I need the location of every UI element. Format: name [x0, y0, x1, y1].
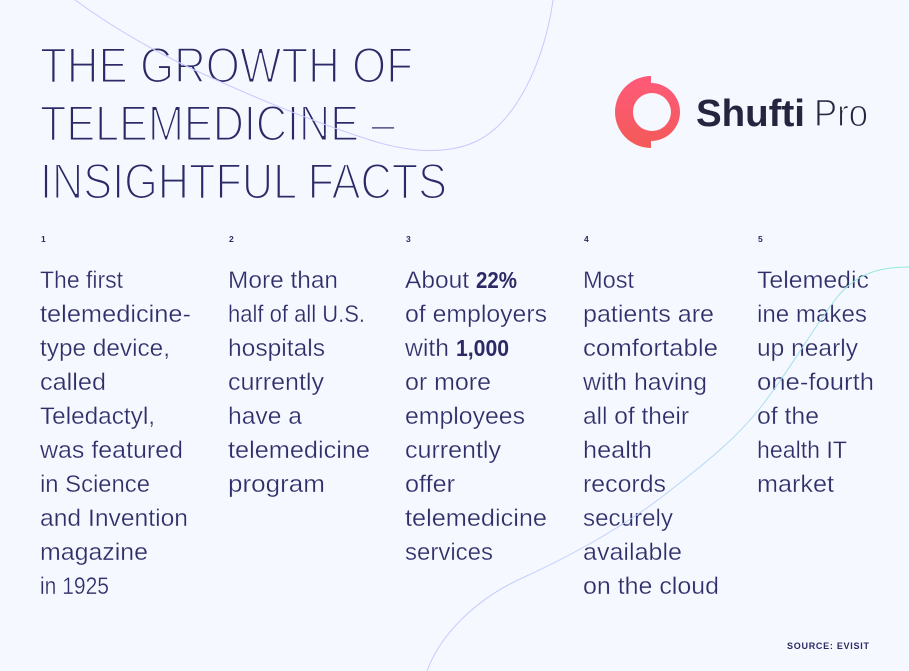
fact 2: [228, 234, 370, 498]
title: THE GROWTH OF: [40, 38, 413, 94]
fact 2: 2: [229, 234, 234, 244]
fact 1: Teledactyl,: [40, 403, 155, 430]
fact 2: hospitals: [228, 335, 325, 362]
fact 1: was featured: [39, 437, 183, 464]
fact 5: health IT: [757, 437, 847, 464]
fact 1: called: [40, 369, 106, 396]
title: [40, 38, 447, 210]
fact 5: ine makes: [757, 301, 867, 328]
fact 3: 3: [406, 234, 411, 244]
fact 3: 1,000: [456, 335, 509, 361]
decorative curve top: [75, 0, 553, 151]
fact 5: market: [757, 471, 834, 498]
fact 5: [757, 234, 874, 498]
fact 4: all of their: [583, 403, 689, 430]
fact 4: available: [583, 539, 682, 566]
fact 5: one-fourth: [757, 369, 874, 396]
fact 3: offer: [405, 471, 455, 498]
fact 1: and Invention: [40, 505, 188, 532]
fact 1: in 1925: [40, 573, 109, 600]
logo: Shufti Pro: [615, 76, 868, 148]
fact 3: employees: [405, 403, 525, 430]
fact 2: half of all U.S.: [228, 301, 365, 328]
decorative curve bottom: [427, 267, 909, 671]
fact 3: or more: [405, 369, 491, 396]
fact 5: up nearly: [757, 335, 859, 362]
fact 3: About: [405, 267, 469, 294]
fact 1: type device,: [40, 335, 170, 362]
fact 1: in Science: [40, 471, 150, 498]
fact 4: [582, 234, 719, 600]
fact 2: have a: [228, 403, 302, 430]
fact 3: [404, 234, 547, 566]
fact 1: [39, 234, 191, 600]
fact 5: 5: [758, 234, 763, 244]
logo wordmark: Pro: [814, 93, 868, 135]
fact 4: securely: [583, 505, 674, 532]
fact 3: currently: [405, 437, 502, 464]
fact 3: of employers: [405, 301, 547, 328]
fact 1: The first: [40, 267, 123, 294]
fact 2: program: [228, 471, 325, 498]
fact 2: telemedicine: [228, 437, 370, 464]
fact 4: with having: [582, 369, 707, 396]
title: INSIGHTFUL FACTS: [40, 154, 447, 210]
fact 4: on the cloud: [583, 573, 719, 600]
fact 4: records: [583, 471, 666, 498]
fact 3: telemedicine: [405, 505, 547, 532]
fact 4: health: [583, 437, 652, 464]
title: TELEMEDICINE –: [40, 96, 395, 152]
fact 3: services: [405, 539, 493, 566]
fact 1: 1: [41, 234, 46, 244]
fact 3: with: [404, 335, 449, 362]
logo wordmark: [696, 93, 868, 135]
fact 1: magazine: [40, 539, 148, 566]
fact 5: of the: [757, 403, 819, 430]
fact 4: comfortable: [583, 335, 718, 362]
fact 3: 22%: [476, 267, 517, 293]
fact 4: patients are: [583, 301, 714, 328]
fact 2: currently: [228, 369, 325, 396]
fact 2: More than: [228, 267, 338, 294]
fact 5: Telemedic: [757, 267, 869, 294]
logo wordmark: Shufti: [696, 93, 805, 135]
icon: logo ring: [615, 76, 680, 148]
source note: SOURCE: EVISIT: [787, 641, 870, 651]
fact 4: Most: [583, 267, 634, 294]
fact 1: telemedicine-: [40, 301, 191, 328]
fact 4: 4: [584, 234, 589, 244]
